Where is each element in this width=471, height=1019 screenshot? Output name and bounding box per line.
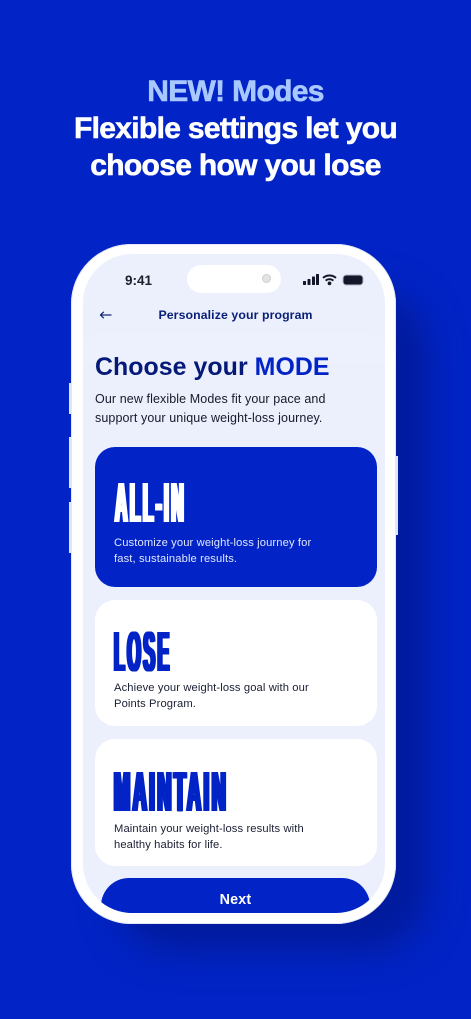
maintain title: MAINTAIN [114,760,229,824]
phone power button [395,456,398,535]
icon: signal [303,274,319,285]
lose description: Points Program. [114,698,196,710]
all-in title: ALL-IN [115,471,186,535]
maintain description: healthy habits for life. [114,839,223,851]
phone screen [83,254,385,913]
back arrow [100,311,112,319]
phone drop shadow [116,290,428,952]
dynamic island [187,265,281,293]
status icons [303,274,364,286]
screen intro text: support your unique weight-loss journey. [95,411,323,425]
phone volume up button [69,437,72,488]
card: lose [95,600,377,726]
content sheet top highlight [83,333,385,363]
phone frame [71,244,396,924]
screen intro text: Our new flexible Modes fit your pace and [95,392,326,406]
card: all-in [95,447,377,587]
phone side button [69,383,72,414]
maintain description [114,823,304,851]
heading: NEW! Modes: NEW! Modes [147,75,324,108]
lose title: LOSE [114,620,172,684]
lose description [114,682,309,710]
all-in description: Customize your weight-loss journey for [114,537,311,549]
title [74,75,397,182]
all-in description [114,537,312,565]
maintain description: Maintain your weight-loss results with [114,823,304,835]
all-in description: fast, sustainable results. [114,553,237,565]
heading: flexible settings line 1: Flexible settings let you [74,112,397,145]
status bar time: 9:41 [125,273,152,288]
card: maintain [95,739,377,866]
screen heading: Choose your MODE [95,353,330,381]
icon: wifi [323,275,336,284]
icon: battery [343,275,363,285]
heading: flexible settings line 2: choose how you lose [90,149,381,182]
next label: Next [220,892,251,908]
phone volume down button [69,502,72,553]
screen intro text [95,392,326,425]
camera lens [262,274,271,283]
phone mockup [69,244,398,924]
next button [101,878,370,938]
lose description: Achieve your weight-loss goal with our [114,682,309,694]
nav title: Personalize your program [158,308,313,322]
